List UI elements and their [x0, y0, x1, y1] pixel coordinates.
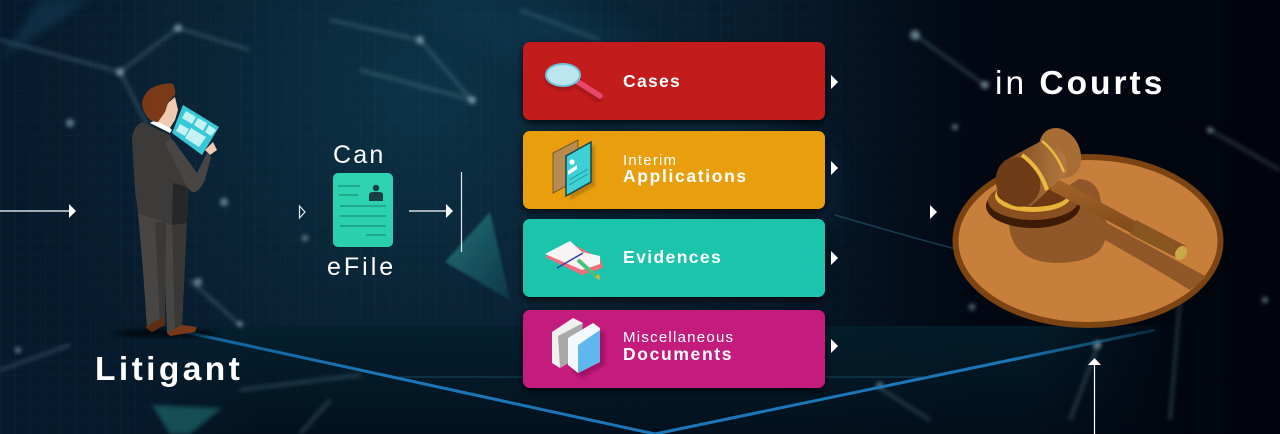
- text: miscellaneous documents: Miscellaneous: [623, 329, 734, 346]
- panel: interim applications: [523, 131, 825, 209]
- arrows: category pointers: [831, 75, 937, 353]
- label: Litigant: Litigant: [95, 351, 243, 388]
- arrow: entering litigant: [0, 204, 76, 218]
- panel: miscellaneous documents: [523, 310, 825, 388]
- arrow: to categories: [409, 204, 453, 218]
- table shadow: [1009, 179, 1207, 290]
- icon: book: [545, 241, 603, 280]
- panel: evidences: [523, 219, 825, 297]
- label: eFile: eFile: [327, 253, 396, 281]
- panel: cases: [523, 42, 825, 120]
- text: miscellaneous documents: [623, 329, 734, 364]
- text: interim applications: Interim: [623, 152, 677, 169]
- heading: in Courts: in Courts: [995, 65, 1165, 102]
- arrow: hollow triangle: [300, 206, 305, 218]
- icon: magnifier: [546, 64, 601, 101]
- icon: document: [333, 173, 393, 247]
- figure: litigant: [113, 83, 219, 337]
- faint triangles: [445, 212, 510, 300]
- text: miscellaneous documents: Documents: [623, 344, 733, 364]
- arrow: up to courts: [1088, 358, 1101, 434]
- text: Evidences: Evidences: [623, 247, 722, 267]
- floor line: [185, 330, 1155, 434]
- icon: papers: [553, 140, 595, 200]
- bracket line: [460, 172, 462, 252]
- icon: gavel on round table: [956, 121, 1220, 325]
- text: interim applications: [623, 152, 748, 186]
- label: Can: Can: [333, 141, 385, 169]
- text: Cases: Cases: [623, 71, 681, 91]
- text: interim applications: Applications: [623, 166, 748, 186]
- icon: books: [552, 318, 605, 378]
